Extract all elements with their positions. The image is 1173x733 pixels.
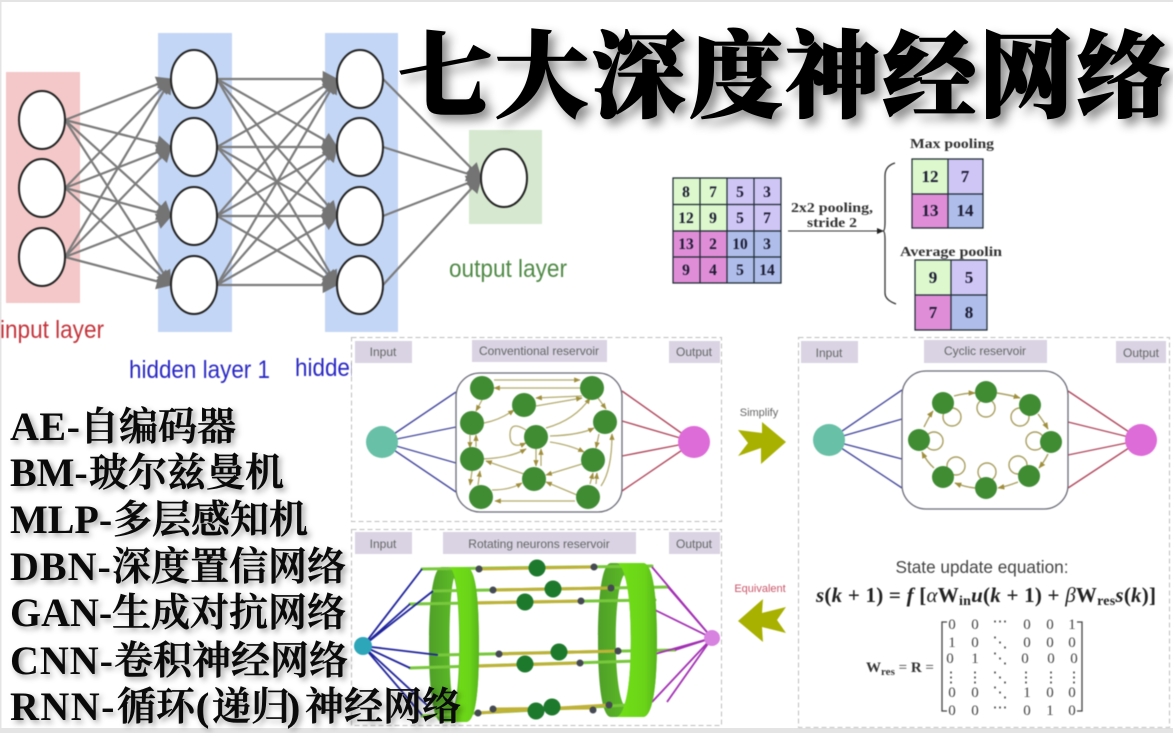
tag: rotating neurons reservoir: Rotating neurons reservoir: [468, 537, 610, 551]
tag: input: [355, 341, 412, 363]
layer band: hidden 2: [325, 33, 398, 332]
grid: 4x4 input: 3: [763, 184, 771, 201]
grid: average pooling: 5: [965, 268, 973, 287]
matrix: 1: [1046, 703, 1054, 719]
matrix: 0: [971, 617, 979, 633]
list item: AE: AE-: [10, 404, 80, 449]
tag: rotating neurons reservoir: [443, 532, 636, 554]
layer band: input: [6, 72, 80, 303]
panel: conventional reservoir: [352, 338, 722, 522]
matrix: ⋱: [992, 685, 1008, 701]
matrix: ⋮: [1066, 670, 1082, 686]
tag: cyclic reservoir: [924, 340, 1047, 363]
matrix: 0: [1068, 635, 1076, 651]
output node: [1125, 424, 1157, 456]
matrix: ⋯: [992, 614, 1008, 630]
layer band: hidden 1: [158, 33, 232, 332]
grid: 4x4 input: 5: [736, 262, 744, 279]
label: hidden layer 2, clipped by panel: hidden layer 2: [295, 354, 436, 382]
matrix: 0: [1047, 651, 1055, 667]
grid: 4x4 input: 5: [736, 210, 744, 227]
diagram: feed-forward neural network: [0, 33, 567, 384]
equation: s(k + 1) = f [αW: [816, 583, 959, 607]
layer band: output: [469, 130, 542, 224]
list item: BM: 玻尔兹曼机: [89, 452, 284, 495]
caption: stride: stride 2: [807, 215, 857, 230]
input node: [813, 424, 845, 456]
caption: pooling params: 2x2 pooling,: [791, 200, 873, 215]
ring: left, back band: [429, 567, 479, 722]
input sphere: [354, 637, 372, 655]
output links: [1068, 391, 1141, 488]
grid: 4x4 input: 9: [709, 210, 717, 227]
matrix: [942, 614, 1082, 719]
matrix: 0: [948, 703, 956, 719]
tag: conventional reservoir: [472, 340, 607, 362]
matrix: 1: [948, 635, 956, 651]
tag: conventional reservoir: Conventional reservoir: [479, 344, 599, 358]
input links: [829, 390, 902, 488]
arrow: [788, 230, 880, 232]
tag: output: [669, 341, 720, 363]
equation: in: [959, 594, 971, 609]
ring links: [922, 393, 1048, 488]
grid: 4x4 input: 7: [763, 210, 771, 227]
grid: 4x4 input: 14: [759, 262, 775, 279]
matrix: 1: [1068, 617, 1076, 633]
input links: [363, 569, 438, 715]
ring: right, back band: [598, 563, 657, 717]
matrix label: R =: [911, 660, 934, 676]
network neurons: [19, 50, 527, 314]
output links: [652, 567, 712, 702]
list item: RNN: ): [287, 686, 300, 729]
diagram: pooling: [673, 136, 1003, 330]
matrix: 0: [948, 617, 956, 633]
grid: 4x4 input: 2: [709, 236, 717, 253]
caption: average pooling: Average poolin: [900, 244, 1003, 259]
list item: CNN: CNN-: [10, 638, 114, 683]
list item: RNN: 递归: [212, 686, 290, 729]
output sphere: [704, 630, 720, 646]
matrix: 0: [1023, 703, 1031, 719]
reservoir links: [470, 380, 612, 501]
tag: output: [669, 532, 720, 554]
input node: [366, 426, 398, 458]
grid: 4x4 input: 7: [709, 184, 717, 201]
panel: rotating neurons reservoir: [352, 530, 722, 726]
rods: [410, 566, 675, 716]
grid: 4x4 input: 9: [682, 262, 690, 279]
matrix: ⋱: [992, 635, 1008, 651]
label: hidden layer 1: hidden layer 1: [129, 356, 270, 384]
grid: 4x4 input: [673, 178, 781, 283]
reservoir box: [902, 371, 1068, 509]
matrix: ⋯: [992, 700, 1008, 716]
grid: 4x4 input: 10: [732, 236, 748, 253]
grid: max pooling: 7: [961, 167, 970, 186]
grid: average pooling: 7: [929, 303, 938, 322]
list item: RNN: RNN-: [10, 684, 116, 729]
tag: output: Output: [676, 537, 713, 551]
reservoir nodes: [460, 376, 617, 509]
matrix: ⋮: [1044, 670, 1058, 686]
tag: input: [801, 341, 858, 363]
matrix: 0: [1046, 685, 1054, 701]
matrix label: =: [895, 660, 911, 676]
ring: right, front band: [616, 563, 657, 717]
matrix: 0: [1023, 635, 1031, 651]
grid: average pooling: [915, 260, 987, 330]
equation: s: [1114, 583, 1124, 607]
matrix: 0: [948, 685, 956, 701]
list item: DBN: 深度置信网络: [112, 546, 346, 589]
list item: GAN: 生成对抗网络: [112, 592, 346, 635]
equation: (k + 1) + βW: [983, 583, 1097, 607]
reservoir box: [456, 373, 622, 512]
matrix: ⋮: [1018, 670, 1034, 686]
list item: RNN: (: [196, 686, 209, 729]
grid: max pooling: 12: [922, 167, 938, 186]
tag: output: Output: [1123, 346, 1160, 360]
arrow: simplify: Simplify: [740, 407, 779, 419]
arrow: equivalent: Equivalent: [734, 583, 786, 595]
list item: AE: 自编码器: [80, 406, 236, 449]
matrix: ⋱: [992, 651, 1008, 667]
grid: max pooling: 13: [922, 201, 938, 220]
ring: left, front band: [448, 567, 479, 722]
grid: max pooling: 14: [956, 201, 974, 220]
label: input layer: input layer: [0, 316, 104, 344]
matrix: 1: [1023, 685, 1031, 701]
label: output layer: output layer: [449, 255, 567, 283]
grid: 4x4 input: 4: [709, 262, 717, 279]
grid: max pooling: [912, 159, 983, 228]
tag: input: Input: [370, 537, 397, 551]
matrix: ⋮: [944, 670, 958, 686]
tag: output: Output: [676, 345, 713, 359]
title: 七大深度神经网络: [398, 25, 1170, 130]
matrix: 0: [1046, 635, 1054, 651]
matrix: 0: [1068, 685, 1076, 701]
list item: MLP: MLP-: [10, 497, 112, 542]
grid: 4x4 input: 12: [678, 210, 694, 227]
list item: MLP: 多层感知机: [113, 499, 308, 542]
panel: cyclic reservoir and equation: [798, 338, 1170, 728]
matrix: 0: [1021, 651, 1029, 667]
output links: [622, 391, 694, 491]
list item: RNN: 神经网络: [305, 686, 461, 729]
grid: 4x4 input: 8: [682, 184, 690, 201]
tag: output: [1116, 341, 1166, 363]
matrix: 0: [971, 635, 979, 651]
tag: input: [355, 532, 412, 554]
tag: input: Input: [370, 345, 397, 359]
list item: BM: BM-: [10, 450, 88, 495]
grid: average pooling: 8: [965, 303, 973, 322]
matrix: 0: [1046, 617, 1054, 633]
matrix: 1: [971, 651, 979, 667]
heading: state update equation: State update equation:: [896, 557, 1068, 577]
grid: 4x4 input: 5: [736, 184, 744, 201]
network connections: [65, 79, 481, 285]
matrix: ⋮: [968, 670, 982, 686]
brace: [883, 163, 896, 304]
grid: 4x4 input: 3: [763, 236, 771, 253]
input links: [382, 392, 456, 492]
list item: DBN: DBN-: [10, 544, 112, 589]
matrix: 0: [1023, 617, 1031, 633]
matrix: 0: [1068, 703, 1076, 719]
matrix label: res: [881, 666, 896, 678]
caption: max pooling: Max pooling: [910, 136, 994, 151]
matrix: 0: [971, 685, 979, 701]
small neurons: [474, 564, 622, 716]
large neurons: [516, 560, 568, 720]
matrix: 0: [1070, 651, 1078, 667]
tag: input: Input: [816, 346, 843, 360]
equation: (k)]: [1124, 583, 1156, 607]
matrix: 0: [971, 703, 979, 719]
equation: res: [1097, 594, 1116, 609]
arrow: simplify: [738, 407, 786, 464]
equation: u: [971, 583, 983, 607]
arrow: equivalent: [734, 583, 786, 642]
matrix: 0: [946, 651, 954, 667]
grid: 4x4 input: 13: [678, 236, 694, 253]
list item: CNN: 卷积神经网络: [114, 640, 348, 683]
output node: [678, 426, 710, 458]
tag: cyclic reservoir: Cyclic reservoir: [944, 344, 1026, 358]
list: seven network types: [10, 404, 461, 729]
matrix label: W: [866, 660, 881, 676]
list item: GAN: GAN-: [10, 590, 112, 635]
list item: RNN: 循环: [117, 686, 197, 729]
grid: average pooling: 9: [929, 268, 937, 287]
matrix: ⋱: [992, 670, 1008, 686]
reservoir nodes: [908, 381, 1062, 499]
